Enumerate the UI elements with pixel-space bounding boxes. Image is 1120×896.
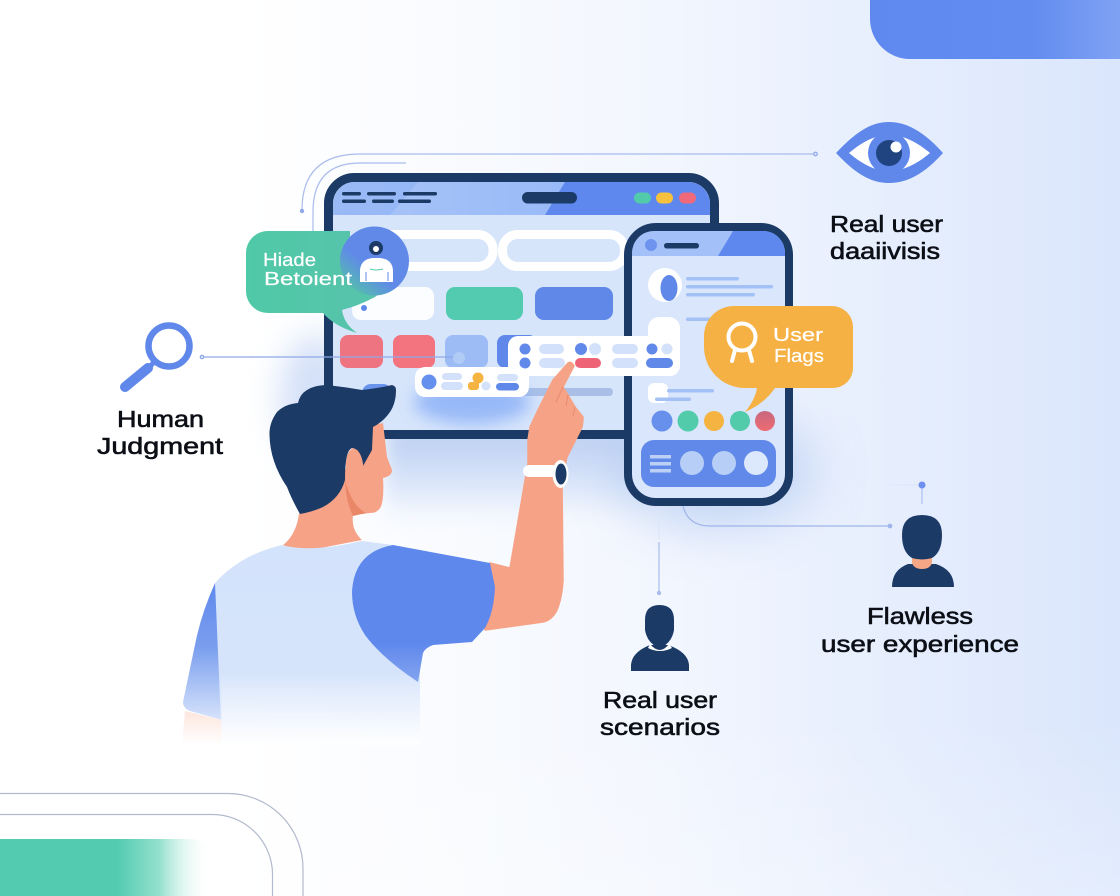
tablet frame and screen xyxy=(328,178,714,434)
colour dots xyxy=(652,410,775,432)
left sleeve xyxy=(183,583,222,720)
small message row xyxy=(648,383,714,403)
progress bar xyxy=(500,388,613,396)
ear xyxy=(346,448,363,487)
bubble text: User xyxy=(773,325,823,345)
phone frame and screen xyxy=(628,227,789,502)
watch xyxy=(523,460,568,488)
magnifier icon xyxy=(125,326,190,387)
phone bottom bar xyxy=(641,440,776,487)
lower arm fade xyxy=(182,711,222,745)
hair xyxy=(269,385,396,514)
raised arm xyxy=(485,362,583,630)
connector: phone to flawless user xyxy=(683,506,892,528)
eye icon xyxy=(836,122,943,183)
user icon: flawless experience xyxy=(892,515,954,587)
orange speech bubble xyxy=(704,306,853,412)
corner block: top right xyxy=(870,0,1120,59)
profile row xyxy=(648,268,773,321)
orange speech bubble: Flags xyxy=(774,346,824,366)
small popup card xyxy=(415,367,529,397)
connector: top lines xyxy=(300,152,817,232)
person from behind xyxy=(182,362,583,745)
tablet header xyxy=(333,182,710,215)
shirt body xyxy=(215,541,420,745)
label: real user scenarios: scenarios xyxy=(600,714,720,740)
user icon: real user scenarios xyxy=(631,605,689,671)
search pills xyxy=(350,234,624,266)
soft shadows behind devices xyxy=(280,335,815,540)
blue tab under hair xyxy=(362,384,392,404)
phone header xyxy=(632,231,785,256)
popup shadow xyxy=(414,380,530,424)
label: real user scenarios xyxy=(600,687,720,740)
blue dot xyxy=(361,305,367,311)
tile row xyxy=(340,335,537,368)
green speech bubble: Betoient xyxy=(264,269,352,289)
bubble body and tail xyxy=(704,306,853,412)
green speech bubble xyxy=(246,226,409,333)
label: human judgment: Human xyxy=(117,406,204,432)
label: real user scenarios: Real user xyxy=(603,687,717,713)
corner decoration: bottom left xyxy=(0,794,303,896)
label: flawless user experience xyxy=(821,603,1019,657)
button row xyxy=(352,287,613,320)
label: flawless user experience: Flawless xyxy=(867,603,973,629)
label: real user analysis: Real user xyxy=(830,211,943,237)
label: flawless user experience: user experience xyxy=(821,631,1019,657)
tablet xyxy=(328,178,714,434)
label: human judgment xyxy=(97,406,224,459)
phone xyxy=(628,227,789,502)
large popup card xyxy=(508,336,680,376)
avatar circle xyxy=(340,226,409,296)
neck and face xyxy=(283,423,392,552)
bubble body and tail xyxy=(246,231,393,333)
finger crease xyxy=(556,387,575,416)
label: real user analysis xyxy=(830,211,943,264)
right sleeve xyxy=(352,545,495,682)
bubble text: Hiade xyxy=(263,250,316,270)
connector: phone to real user xyxy=(657,520,661,595)
connector: above flawless user xyxy=(890,482,926,504)
connector: human judgment line xyxy=(200,352,465,364)
ribbon icon xyxy=(728,324,756,361)
white card stub xyxy=(648,317,680,357)
label: human judgment: Judgment xyxy=(97,433,224,459)
label: real user analysis: daaiivisis xyxy=(830,238,940,264)
